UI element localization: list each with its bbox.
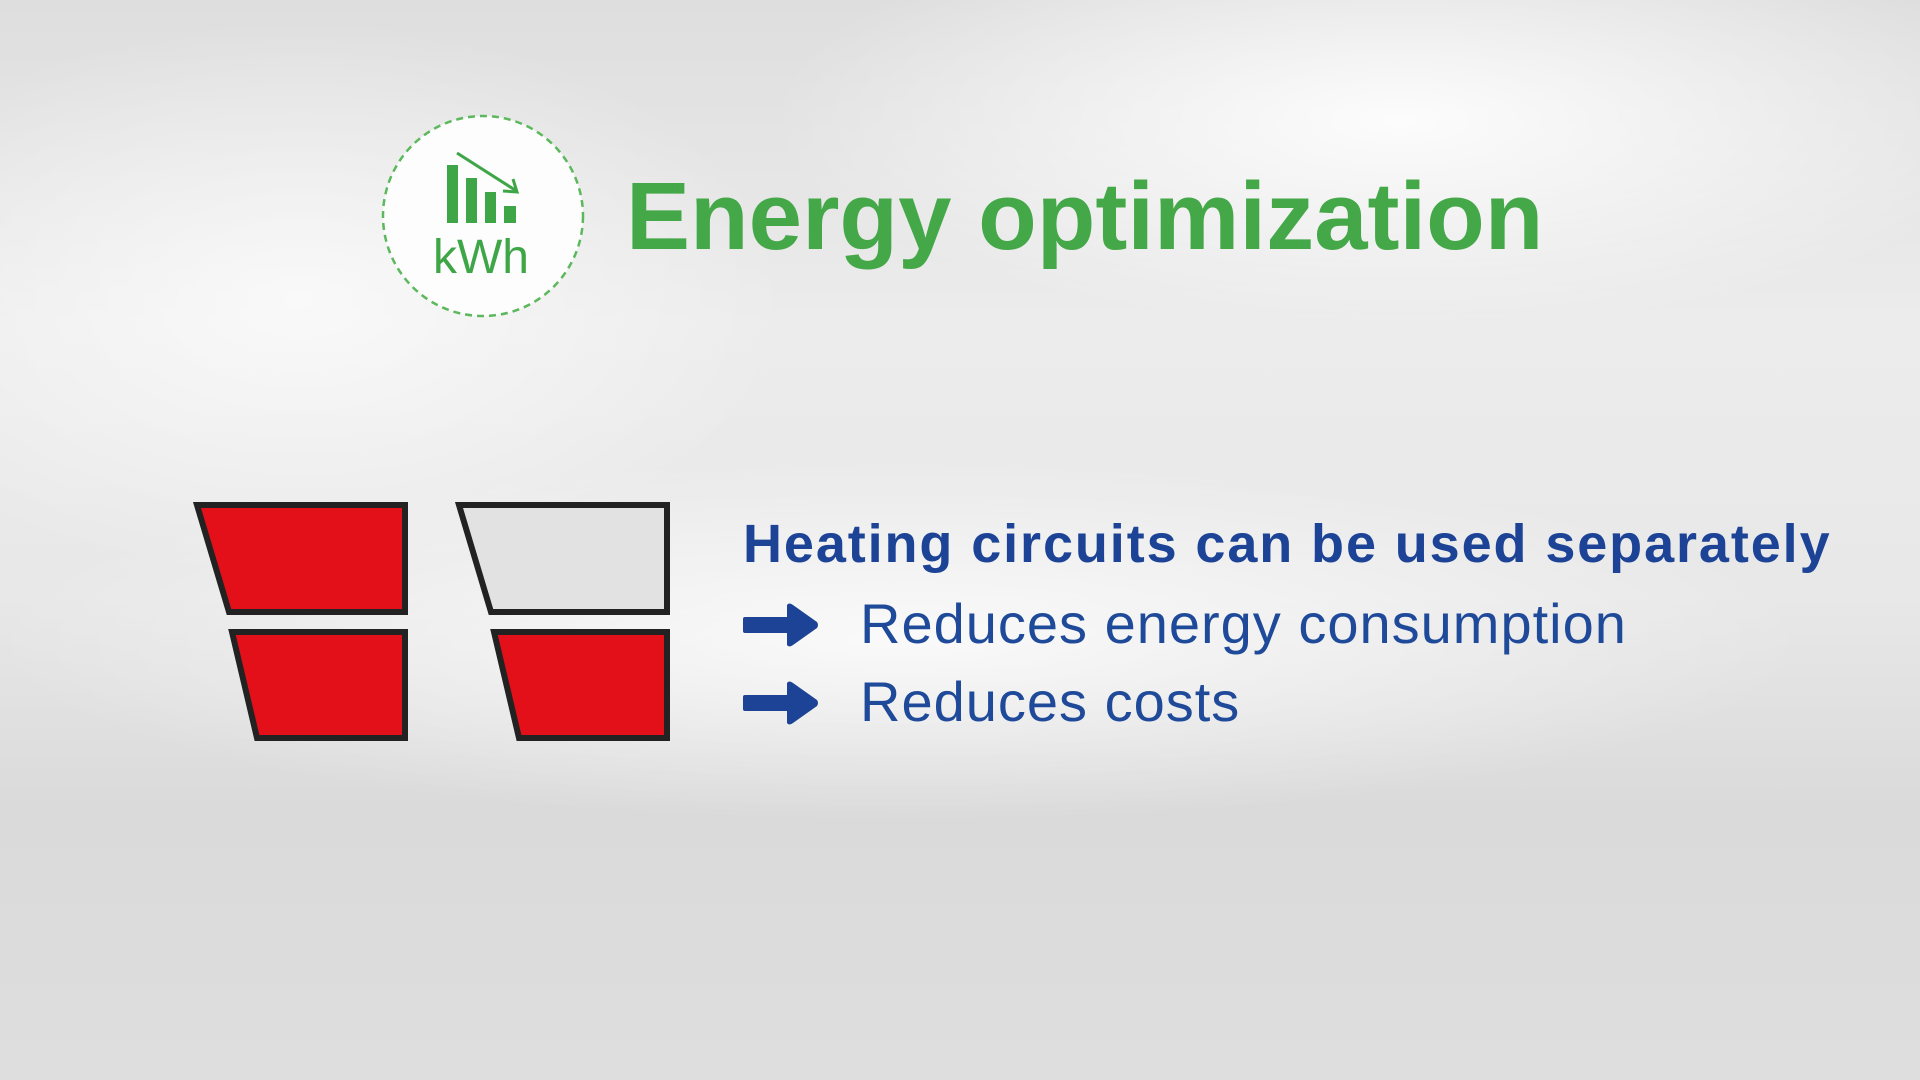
illustration: heating circuits [193,502,670,741]
icon: arrow [743,682,818,724]
icon: kWh circle [382,114,584,318]
list item 1: Reduces energy consumption [860,592,1627,655]
heading: heating circuits: Heating circuits can be used separately [743,514,1832,574]
list item 2: Reduces costs [860,670,1240,733]
icon: arrow [743,604,818,646]
icon: kWh circle: kWh [433,231,529,284]
title: Energy optimization [626,163,1543,270]
